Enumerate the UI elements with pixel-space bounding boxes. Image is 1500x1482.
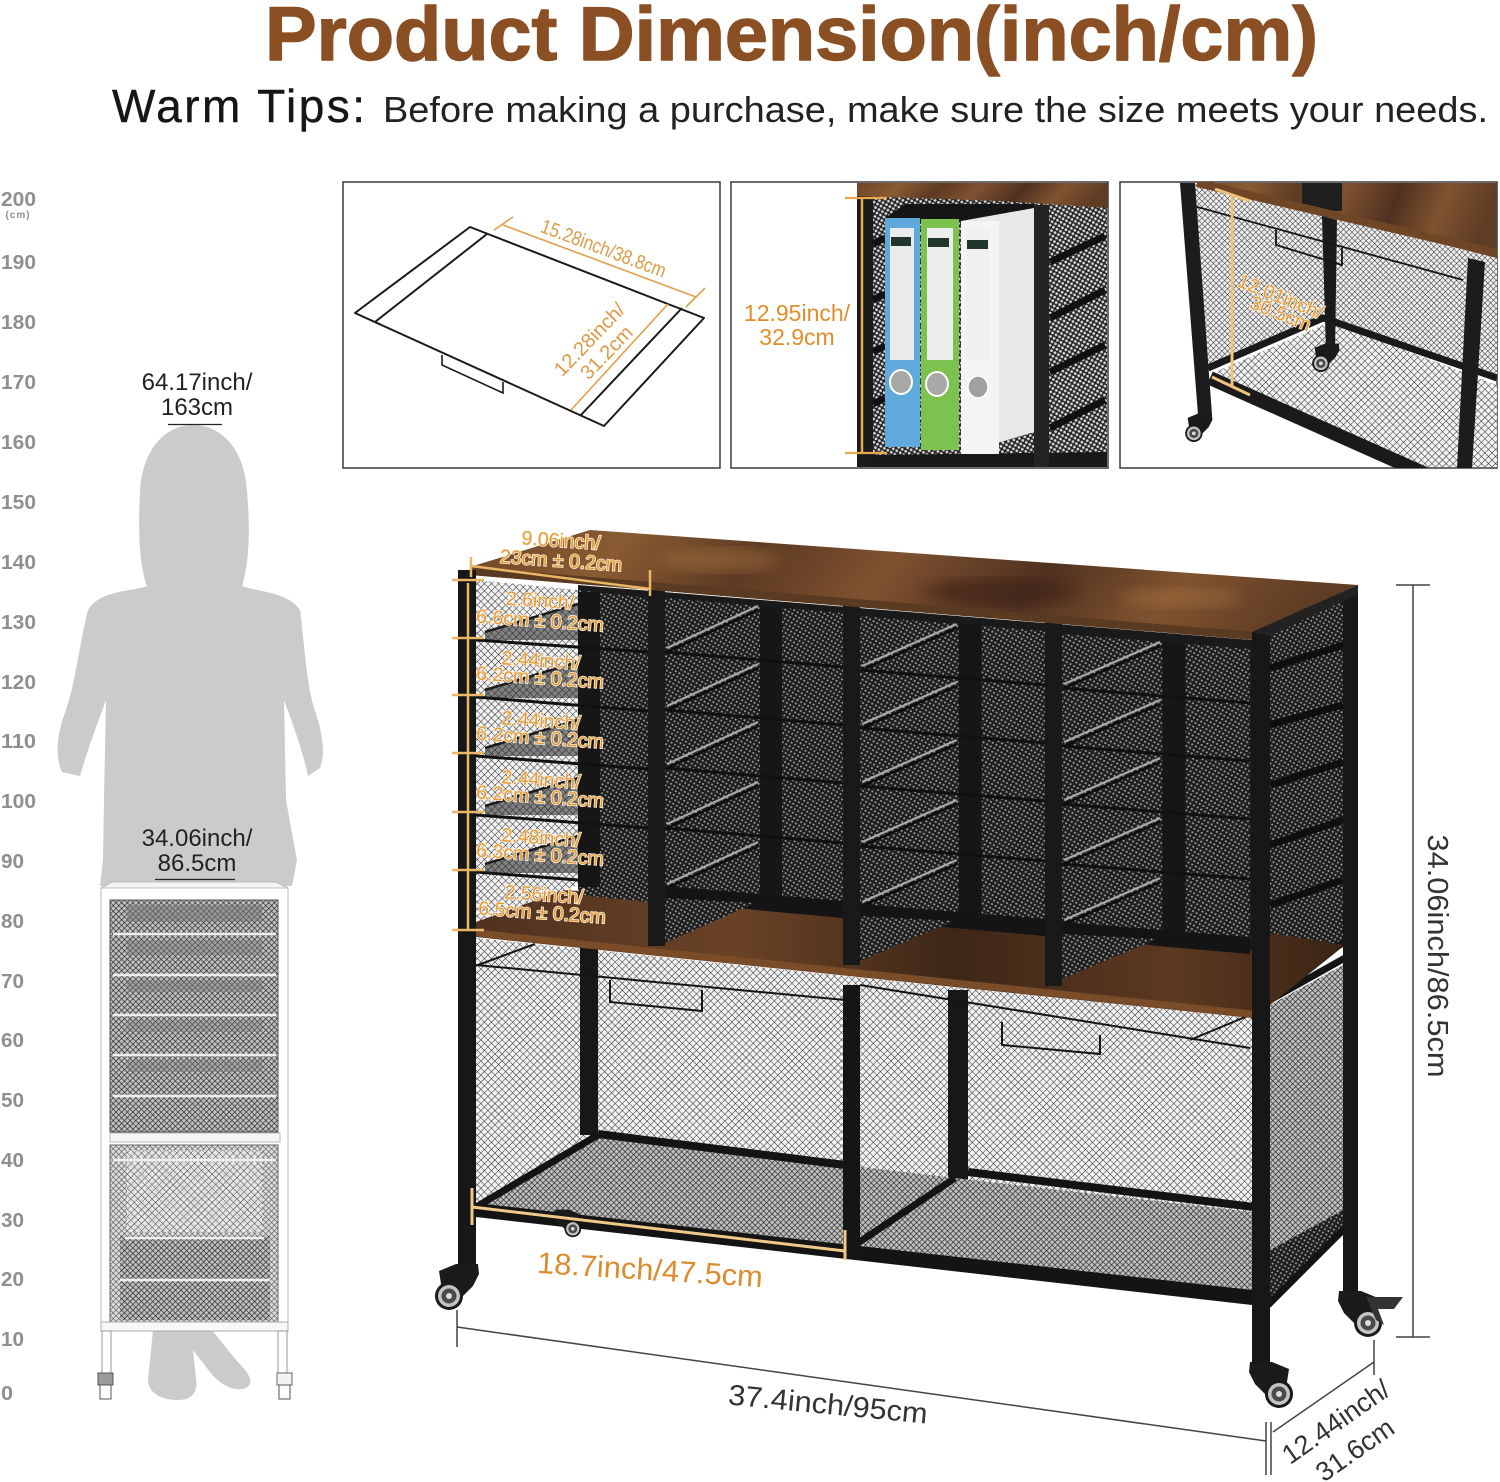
height scale in cm: 0 [1, 1383, 13, 1405]
drawer labels: 6.5cm ± 0.2cm [478, 898, 606, 928]
drawer labels: 6.2cm ± 0.2cm [476, 723, 604, 753]
panel: binder capacity: 32.9cm [759, 324, 835, 350]
top wood board [470, 530, 1358, 640]
height scale in cm: 40 [1, 1150, 24, 1172]
side view width label: 86.5cm [158, 850, 236, 877]
panel: drawer dimensions [343, 182, 720, 468]
overall depth dimension: 12.44inch/ [1276, 1374, 1396, 1470]
inner width dimension: 18.7inch/47.5cm [536, 1247, 764, 1294]
panel: drawer dimensions: 15.28inch/38.8cm [538, 216, 669, 282]
drawer labels: 2.48inch/ [501, 824, 582, 852]
overall height dimension: 34.06inch/86.5cm [1421, 834, 1453, 1078]
drawer labels: 2.44inch/ [501, 707, 582, 735]
warm tips [112, 80, 1488, 132]
drawer labels: 6.3cm ± 0.2cm [476, 840, 604, 870]
person silhouette [58, 425, 323, 1400]
panel: lower drawer height: 30.5cm [1247, 292, 1314, 336]
side view width label: 34.06inch/ [142, 825, 253, 852]
height scale in cm: 110 [1, 731, 36, 753]
person height label [142, 369, 253, 424]
casters [435, 1210, 1403, 1408]
height scale in cm: 140 [1, 552, 36, 574]
gold drawer dimensions [452, 557, 650, 930]
height scale in cm [1, 189, 36, 1405]
panel: binder capacity [731, 182, 1108, 468]
drawer labels: 2.44inch/ [501, 766, 582, 794]
overall width dimension: 37.4inch/95cm [727, 1379, 929, 1431]
drawer labels: 23cm ± 0.2cm [499, 546, 623, 576]
height scale in cm: 180 [1, 312, 36, 334]
person height label: 163cm [161, 394, 233, 421]
height scale in cm: 20 [1, 1269, 24, 1291]
lower back posts [580, 940, 968, 1180]
height scale in cm: 160 [1, 432, 36, 454]
height scale in cm: 130 [1, 612, 36, 634]
middle front post [843, 985, 860, 1258]
height scale in cm: 190 [1, 252, 36, 274]
drawer labels: 2.56inch/ [504, 881, 585, 909]
organizer right section [1062, 634, 1250, 979]
person height label: 64.17inch/ [142, 369, 253, 396]
right side panels [1268, 595, 1345, 1305]
gold height marker [1212, 189, 1250, 395]
organizer center-left section [665, 598, 843, 943]
organizer center-right section [860, 616, 1045, 961]
overall width dimension [457, 1310, 1271, 1475]
overall depth dimension [1273, 1340, 1400, 1482]
drawer labels: 2.6inch/ [505, 588, 575, 614]
height scale in cm: 170 [1, 372, 36, 394]
height scale in cm: 90 [1, 851, 24, 873]
height scale in cm: 50 [1, 1090, 24, 1112]
drawer labels [476, 527, 623, 928]
height scale in cm: 100 [1, 791, 36, 813]
height scale in cm: 70 [1, 971, 24, 993]
panel: binder capacity: 12.95inch/ [744, 300, 851, 326]
drawer labels: 6.6cm ± 0.2cm [476, 606, 604, 636]
height scale in cm: 200 [1, 189, 36, 211]
lower mesh floor [476, 1134, 1254, 1305]
height scale in cm: 120 [1, 672, 36, 694]
height scale in cm: 30 [1, 1210, 24, 1232]
height scale in cm: (cm) [5, 210, 31, 221]
side view cabinet with height label [98, 882, 292, 1399]
height scale in cm: 150 [1, 492, 36, 514]
overall height dimension [1396, 585, 1453, 1337]
panel: drawer dimensions: 12.28inch/ [550, 299, 630, 381]
height scale in cm: 10 [1, 1329, 24, 1351]
height scale in cm: 80 [1, 911, 24, 933]
drawer labels: 6.2cm ± 0.2cm [476, 782, 604, 812]
panel: lower drawer height: 12.01inch/ [1235, 270, 1327, 324]
organizer dividers [648, 590, 1062, 986]
middle wood shelf [476, 885, 1345, 1018]
panel: drawer dimensions: 31.2cm [576, 322, 638, 384]
dark organizer backing [578, 585, 1252, 950]
warm tips: Before making a purchase, make sure the size meets your needs. [383, 89, 1488, 130]
panel: lower drawer height [1120, 182, 1497, 476]
binders [885, 208, 1034, 454]
inner width dimension [472, 1188, 845, 1294]
drawer labels: 9.06inch/ [521, 527, 602, 555]
organizer left section [476, 580, 648, 922]
frame posts [458, 570, 1358, 1366]
side view width label [142, 825, 253, 880]
lower mesh back panels [476, 938, 1252, 1300]
main cabinet [435, 530, 1403, 1408]
drawer labels: 6.2cm ± 0.2cm [476, 663, 604, 693]
drawer labels: 2.44inch/ [501, 647, 582, 675]
height scale in cm: 60 [1, 1030, 24, 1052]
warm tips: Warm Tips: [112, 80, 365, 132]
drawer rails and handles [476, 944, 1250, 1054]
